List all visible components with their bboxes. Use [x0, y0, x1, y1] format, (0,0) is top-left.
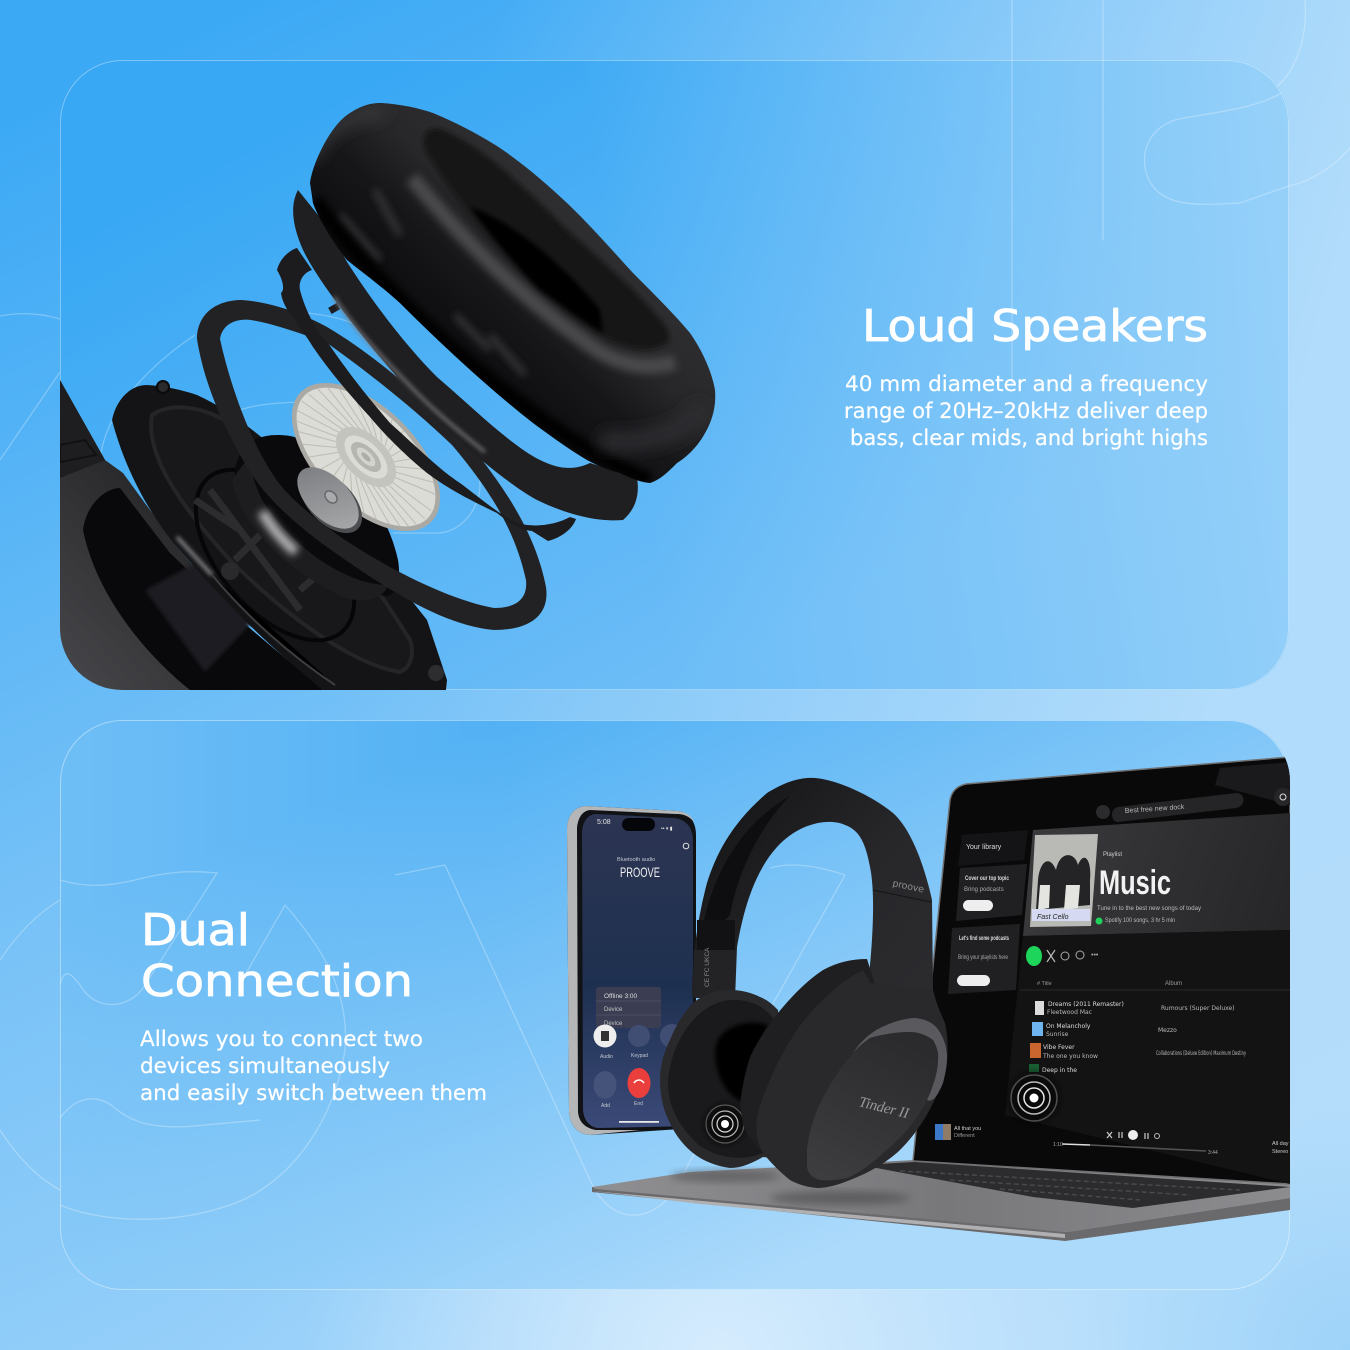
panel 2 line pattern [60, 865, 845, 1219]
play controls [1020, 946, 1290, 990]
text block: speaker description: range of 20Hz–20kHz deliver deep [844, 399, 1208, 423]
player bar: Different [954, 1133, 975, 1139]
play controls: Album [1165, 981, 1182, 987]
hinge block [694, 920, 735, 998]
track rows: Fleetwood Mac [1047, 1009, 1092, 1016]
track rows: On Melancholy [1046, 1023, 1091, 1030]
music title: Tune in to the best new songs of today [1097, 906, 1201, 912]
heading: Dual Connection [141, 905, 413, 1007]
headband [692, 778, 947, 1037]
track rows: Collaborations (Deluxe Edition) Maximum Destiny [1156, 1050, 1246, 1057]
music title: Music [1099, 864, 1171, 902]
player bar: All day [1272, 1141, 1289, 1147]
metal magnet puck [297, 467, 362, 533]
heading: Loud Speakers: Loud Speakers [862, 301, 1208, 352]
search bar [1096, 788, 1292, 822]
phone call buttons [594, 1024, 684, 1123]
phone: Bluetooth audio [617, 857, 655, 863]
phone call buttons: Add [601, 1103, 610, 1109]
track rows: Sunrise [1046, 1031, 1069, 1038]
phone call buttons: Audio [600, 1054, 613, 1060]
panel: loud speakers [60, 60, 1289, 690]
headphone shadow on deck [670, 1170, 780, 1182]
track list panel [1005, 930, 1290, 1184]
text block: connection description [140, 1027, 487, 1105]
text block: connection description: Allows you to connect two [140, 1027, 423, 1051]
track rows: Rumours (Super Deluxe) [1161, 1005, 1235, 1012]
panel 1 line pattern [100, 60, 1289, 533]
phone: PROOVE [620, 864, 660, 880]
text block: speaker description: 40 mm diameter and a frequency [845, 372, 1208, 396]
phone call buttons: Keypad [631, 1053, 648, 1059]
track rows: Mezzo [1158, 1027, 1177, 1034]
headband stub and rear shell [60, 380, 323, 690]
sidebar cards: Cover our top topic [965, 875, 1009, 882]
phone [567, 806, 696, 1135]
phone: •• ▾ ▮ [661, 826, 673, 832]
cushion inner slit [470, 207, 603, 333]
device scene [567, 757, 1292, 1241]
left ear cup [660, 990, 790, 1168]
phone call buttons: End [634, 1101, 643, 1107]
heading: Dual Connection: Connection [141, 956, 413, 1007]
heading: Dual Connection: Dual [141, 905, 250, 956]
player bar: All that you [954, 1126, 981, 1132]
sidebar cards: Your library [966, 844, 1002, 851]
phone notch [622, 818, 655, 831]
hero banner [1023, 813, 1290, 936]
driver frame plate [112, 381, 447, 690]
phone: 5:08 [597, 819, 611, 826]
hinge block: CE FC UKCA [704, 947, 711, 987]
pulse marker on laptop [1010, 1068, 1058, 1122]
screen top notch shade [1215, 762, 1290, 805]
keyboard [860, 1162, 1290, 1208]
Tinder II signature: Tinder II [857, 1094, 911, 1122]
proove logo: proove [891, 878, 925, 896]
player bar: 1:10 [1053, 1142, 1063, 1148]
laptop screen [913, 757, 1292, 1184]
player bar: Stereo [1272, 1149, 1288, 1155]
text block: speaker description [844, 372, 1208, 450]
play controls: # Title [1037, 981, 1052, 987]
text block: connection description: and easily switch between them [140, 1081, 487, 1105]
track rows: Vibe Fever [1043, 1044, 1075, 1051]
exploded headphone speaker illustration [60, 103, 715, 690]
right ear cup cushion [741, 959, 880, 1172]
phone audio menu [596, 987, 661, 1028]
rear cavity [83, 488, 323, 690]
phone audio menu: Offline 3:00 [604, 993, 638, 1000]
over-ear headphones [660, 778, 948, 1188]
leather ear cushion [310, 103, 715, 483]
phone audio menu: Device [604, 1021, 623, 1027]
track rows [1029, 1001, 1246, 1074]
track rows: Dreams (2011 Remaster) [1048, 1001, 1124, 1008]
sidebar cards: Bring podcasts [964, 887, 1004, 893]
ear cup face [807, 1032, 938, 1180]
player bar [935, 1124, 1289, 1156]
gasket ring under cushion [293, 190, 638, 520]
pulse marker on headphone [699, 1098, 751, 1150]
album art [1030, 834, 1098, 927]
music title: Playlist [1103, 852, 1122, 858]
small ring peg [328, 303, 340, 314]
sidebar cards: Bring your playlists here [958, 955, 1009, 961]
music title: Spotify 100 songs, 3 hr 5 min [1105, 917, 1175, 924]
ear cup rim [853, 1018, 947, 1101]
cushion opening [424, 128, 669, 349]
driver motor cup [232, 435, 399, 600]
track rows: The one you know [1042, 1053, 1098, 1060]
player bar: 3:44 [1208, 1150, 1218, 1156]
large flat ring [197, 300, 547, 630]
music title [1096, 852, 1201, 924]
thin tabbed ring [277, 248, 576, 541]
laptop base [592, 1160, 1290, 1241]
right ear cup shell [756, 970, 948, 1188]
search bar: Best free new dock [1125, 804, 1185, 815]
cushion lower lip glow [412, 178, 675, 366]
play controls: ••• [1091, 952, 1099, 959]
sidebar cards: Let's find some podcasts [959, 935, 1009, 942]
track rows: Deep in the [1042, 1067, 1077, 1074]
album art: Fast Cello [1037, 914, 1069, 921]
panel: dual connection [60, 720, 1292, 1290]
text block: speaker description: bass, clear mids, and bright highs [850, 426, 1208, 450]
speaker diaphragm disc [292, 383, 440, 531]
phone audio menu: Device [604, 1007, 623, 1013]
sidebar cards [948, 830, 1028, 994]
text block: connection description: devices simultaneously [140, 1054, 390, 1078]
